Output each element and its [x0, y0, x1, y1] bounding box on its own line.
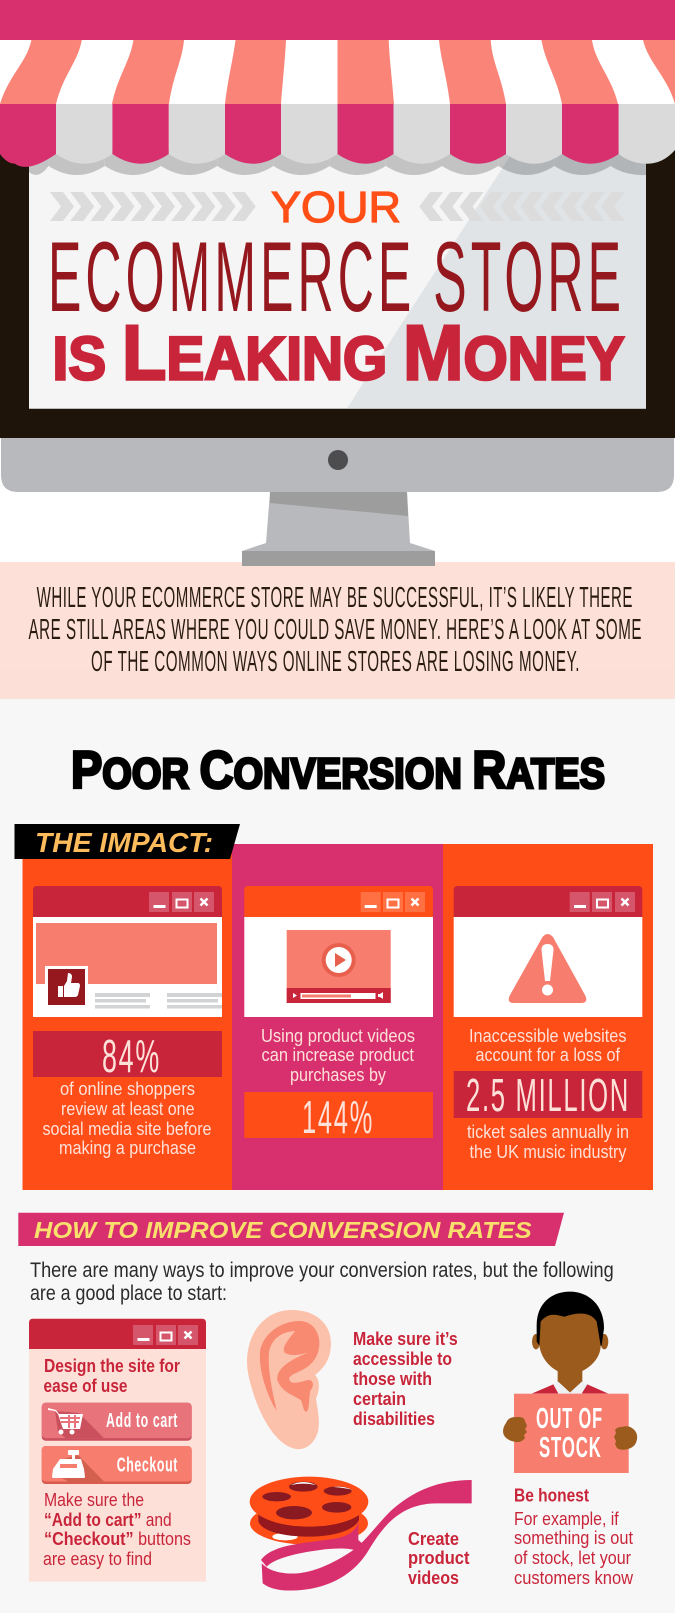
- description: review at least one: [61, 1098, 194, 1119]
- card heading: ease of use: [44, 1376, 128, 1396]
- button: checkout: [42, 1446, 192, 1484]
- decorative chevrons left: [50, 192, 256, 221]
- icon: shopping cart: [48, 1408, 83, 1434]
- intro band background: [0, 562, 675, 699]
- awning: [0, 0, 675, 175]
- description: of online shoppers: [60, 1078, 195, 1099]
- title line: is leaking money: IS LEAKING MONEY: [52, 308, 624, 396]
- video text: product: [408, 1548, 470, 1568]
- description: [261, 1025, 415, 1085]
- icon: warning triangle: [509, 934, 586, 1003]
- intro paragraph: [28, 582, 642, 678]
- description bottom: ticket sales annually in: [467, 1121, 629, 1142]
- hands: [503, 1417, 637, 1450]
- be honest text: [514, 1486, 634, 1588]
- description: purchases by: [290, 1064, 387, 1085]
- intro text: [30, 1258, 614, 1305]
- section heading: poor conversion rates: POOR CONVERSION RATES: [71, 741, 605, 800]
- button: add to cart: [42, 1403, 192, 1441]
- stat: 84%: [33, 1030, 222, 1082]
- column 2: product videos: [244, 886, 433, 1143]
- description: social media site before: [42, 1118, 212, 1139]
- card body text: [43, 1490, 191, 1569]
- title block: [48, 183, 625, 396]
- description bottom: the UK music industry: [470, 1141, 627, 1162]
- button: add to cart: Add to cart: [106, 1410, 178, 1432]
- intro text: are a good place to start:: [30, 1281, 227, 1305]
- monitor illustration: [0, 150, 675, 566]
- card body text: Make sure the: [44, 1490, 144, 1510]
- description: can increase product: [262, 1044, 414, 1065]
- man holding sign: STOCK: [539, 1432, 602, 1464]
- accessibility text: certain: [353, 1389, 406, 1409]
- how to improve ribbon: [18, 1213, 564, 1246]
- accessibility text: [353, 1329, 458, 1429]
- card body text: are easy to find: [43, 1549, 152, 1569]
- card: design the site: [29, 1319, 206, 1582]
- stat: 144%: 144%: [302, 1091, 374, 1143]
- man head: [532, 1292, 608, 1394]
- description: making a purchase: [59, 1137, 196, 1158]
- be honest text: Be honest: [514, 1486, 589, 1506]
- video text: Create: [408, 1529, 459, 1549]
- accessibility text: accessible to: [353, 1349, 452, 1369]
- be honest text: For example, if: [514, 1509, 620, 1529]
- icon: ear: [247, 1310, 331, 1449]
- sign text: OUT OF: [536, 1403, 603, 1435]
- how to improve ribbon: HOW TO IMPROVE CONVERSION RATES: [34, 1217, 532, 1243]
- description: [42, 1078, 212, 1158]
- card heading: [44, 1356, 180, 1396]
- column 3: inaccessible websites: [454, 886, 642, 1162]
- window: social page: [33, 886, 222, 1017]
- description top: [469, 1025, 626, 1065]
- description top: Inaccessible websites: [469, 1025, 626, 1046]
- stat: 144%: [244, 1091, 433, 1143]
- be honest text: customers know: [514, 1568, 634, 1588]
- decorative chevrons right: [419, 192, 625, 221]
- icon: film reel: [250, 1477, 472, 1591]
- icon: thumbs up: [58, 973, 80, 997]
- window: warning: [454, 886, 642, 1017]
- title line: your: YOUR: [271, 183, 401, 232]
- impact ribbon: [14, 824, 240, 859]
- stat: 84%: 84%: [102, 1030, 161, 1082]
- accessibility text: disabilities: [353, 1409, 435, 1429]
- column 1: social media: [33, 886, 222, 1158]
- video text: [408, 1529, 470, 1588]
- description bottom: [467, 1121, 629, 1162]
- accessibility text: those with: [353, 1369, 432, 1389]
- panel: the impact: [14, 824, 653, 1190]
- icon: cash register: [52, 1450, 85, 1478]
- button: checkout: Checkout: [117, 1455, 178, 1477]
- impact ribbon: THE IMPACT:: [35, 827, 213, 858]
- window: video player: [244, 886, 433, 1017]
- accessibility text: Make sure it’s: [353, 1329, 458, 1349]
- video text: videos: [408, 1568, 459, 1588]
- card heading: Design the site for: [44, 1356, 180, 1376]
- be honest text: something is out: [514, 1528, 633, 1548]
- description top: account for a loss of: [476, 1044, 621, 1065]
- description: Using product videos: [261, 1025, 415, 1046]
- card body text: “Add to cart” and: [44, 1510, 172, 1530]
- card body text: “Checkout” buttons: [44, 1529, 191, 1549]
- be honest text: of stock, let your: [514, 1548, 631, 1568]
- man holding sign: [503, 1292, 637, 1473]
